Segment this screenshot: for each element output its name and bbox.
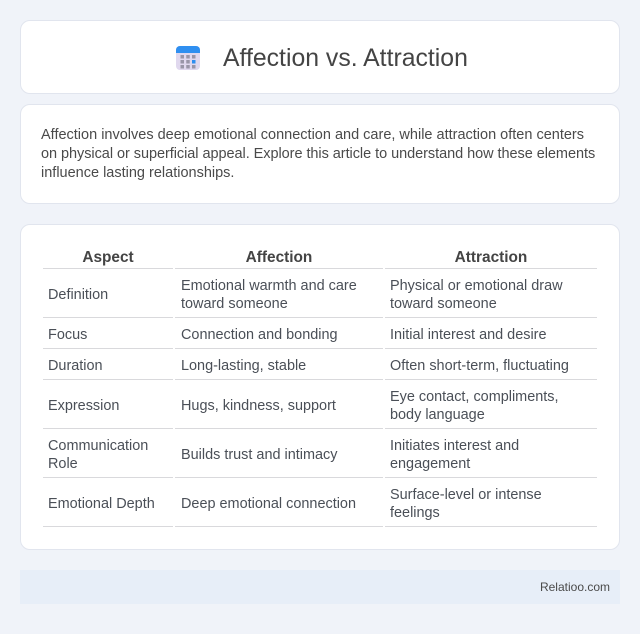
row: Focus: Focus [48, 327, 87, 343]
row: Definition: toward someone [390, 296, 497, 312]
row: Focus: Initial interest and desire [390, 327, 546, 343]
text block: introduction: influence lasting relationships. [41, 165, 234, 181]
table heading: Attraction: Attraction [455, 249, 527, 266]
panel: introduction [20, 104, 620, 204]
row: Expression: Hugs, kindness, support [181, 398, 336, 414]
text block: introduction: Affection involves deep emotional connection and care, while attraction often centers [41, 127, 584, 143]
row: Definition: Emotional warmth and care [181, 278, 357, 294]
row: Duration: Duration [48, 358, 103, 374]
row: Emotional Depth: Surface-level or intense [390, 487, 542, 503]
row: Duration [48, 358, 569, 374]
row: Expression [48, 389, 559, 423]
panel: title card [20, 20, 620, 94]
table heading: Affection: Affection [246, 249, 312, 266]
text block: introduction [41, 127, 595, 181]
row: Focus: Connection and bonding [181, 327, 338, 343]
row: Expression: body language [390, 407, 485, 423]
panel: comparison table [20, 224, 620, 550]
row: Expression: Eye contact, compliments, [390, 389, 559, 405]
row: Definition [48, 278, 563, 312]
row: Communication Role: engagement [390, 456, 470, 472]
row: Definition: Physical or emotional draw [390, 278, 563, 294]
row: Definition: Definition [48, 287, 108, 303]
row: Communication Role: Builds trust and intimacy [181, 447, 337, 463]
text block: introduction: on physical or superficial appeal. Explore this article to understand how these elements [41, 146, 595, 162]
row: Communication Role: Communication [48, 438, 148, 454]
row: Emotional Depth: Emotional Depth [48, 496, 155, 512]
row: Duration: Often short-term, fluctuating [390, 358, 569, 374]
row: Emotional Depth: feelings [390, 505, 440, 521]
row: Emotional Depth [48, 487, 542, 521]
row: Communication Role [48, 438, 519, 472]
icon: calendar [176, 46, 200, 70]
title: Affection vs. Attraction [223, 45, 468, 72]
row: Expression: Expression [48, 398, 119, 414]
footer text: Relatioo.com [540, 580, 610, 594]
table heading: Aspect: Aspect [82, 249, 134, 266]
row: Emotional Depth: Deep emotional connection [181, 496, 356, 512]
row: Duration: Long-lasting, stable [181, 358, 306, 374]
row: Communication Role: Initiates interest and [390, 438, 519, 454]
row: Definition: toward someone [181, 296, 288, 312]
footer bar [20, 570, 620, 604]
row: Focus [48, 327, 546, 343]
row: Communication Role: Role [48, 456, 78, 472]
